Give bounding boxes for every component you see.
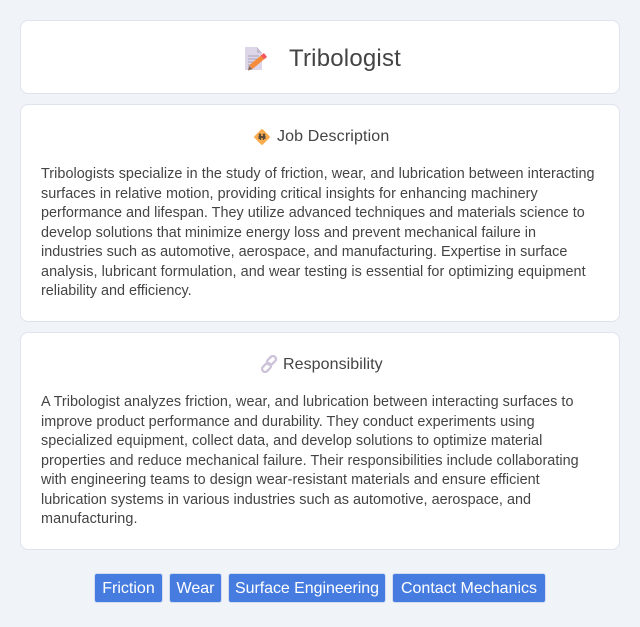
panel: responsibility [20,332,620,550]
panel: job description [20,104,620,322]
heading: job description: Job Description [277,128,389,145]
text block: responsibility: A Tribologist analyzes friction, wear, and lubrication between interacting surfaces to [41,394,574,410]
text block: responsibility: with engineering teams to design wear-resistant materials and ensure efficient [41,472,540,488]
text block: job description: develop solutions that minimize energy loss and prevent mechanical failure in [41,224,536,240]
icon: document with pencil [245,47,267,70]
title: Tribologist [289,45,401,72]
icon: chain link [260,355,278,373]
panel: title card [20,20,620,94]
text block: job description: reliability and efficiency. [41,283,192,299]
tag: friction [94,573,163,603]
text block: responsibility: lubrication systems in various industries such as automotive, aerospace, and [41,492,531,508]
text block: job description: Tribologists specialize in the study of friction, wear, and lubrication between interacting [41,166,595,182]
tag: surface engineering [228,573,386,603]
text block: job description: surfaces in relative motion, providing critical insights for enhancing machinery [41,186,538,202]
text block: job description: performance and lifespan. They utilize advanced techniques and materials science to [41,205,585,221]
tag row [94,573,546,603]
tag: wear: Wear [177,580,214,597]
tag: friction: Friction [102,580,155,597]
text block: responsibility: specialized equipment, collect data, and develop solutions to optimize material [41,433,542,449]
heading: responsibility: Responsibility [283,356,383,373]
text block: job description [41,166,595,299]
tag: contact mechanics [392,573,546,603]
icon: diamond sign [254,129,270,145]
text block: responsibility: properties and reduce mechanical failure. Their responsibilities include collaborating [41,452,579,468]
tag: wear [169,573,222,603]
text block: responsibility: improve product performance and durability. They conduct experiments using [41,414,535,430]
text block: responsibility: manufacturing. [41,511,138,527]
text block: responsibility [41,394,579,527]
tag: contact mechanics: Contact Mechanics [401,580,537,597]
tag: surface engineering: Surface Engineering [235,580,379,597]
text block: job description: industries such as automotive, aerospace, and manufacturing. Expertise in surface [41,244,567,260]
text block: job description: analysis, lubricant formulation, and wear testing is essential for optimizing equipment [41,264,586,280]
